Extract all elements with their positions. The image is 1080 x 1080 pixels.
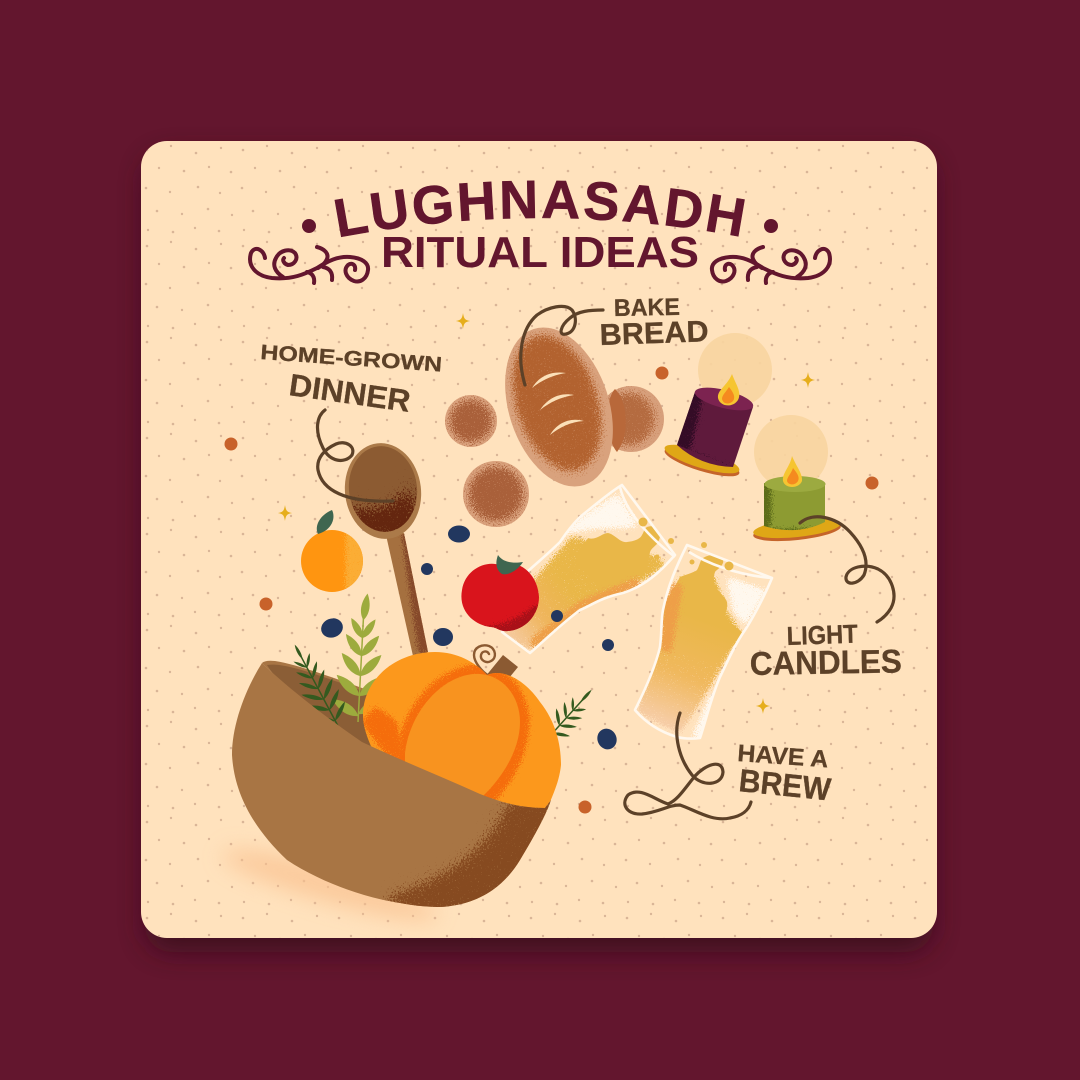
glass: right bbox=[635, 542, 772, 740]
bread: loaf bbox=[505, 328, 613, 486]
title dot left bbox=[302, 219, 316, 233]
candle: green bbox=[752, 415, 842, 545]
candle base bbox=[662, 442, 742, 482]
spoon handle bbox=[386, 533, 428, 656]
glass: left bbox=[498, 485, 675, 653]
fern: dark right bbox=[538, 679, 603, 747]
title bbox=[302, 180, 778, 277]
label: Have a brew: BREW bbox=[737, 762, 833, 808]
orange bbox=[301, 510, 363, 592]
title line: Ritual Ideas: RITUAL IDEAS bbox=[381, 228, 699, 277]
label: Light candles bbox=[749, 619, 902, 682]
candle halo bbox=[698, 333, 772, 407]
card shadow bbox=[145, 155, 933, 952]
label: Home-grown dinner: DINNER bbox=[287, 367, 413, 419]
bowl: inner shade bbox=[267, 665, 395, 765]
glass frost bbox=[558, 492, 642, 546]
label: Bake bread: BREAD bbox=[599, 315, 709, 352]
pumpkin stem bbox=[485, 655, 518, 683]
bread: roll right bbox=[608, 386, 664, 452]
label: Bake bread bbox=[599, 294, 709, 352]
flame bbox=[783, 456, 802, 487]
glass frost bbox=[725, 575, 768, 628]
ornament: left flourish bbox=[250, 247, 368, 283]
bubbles bbox=[638, 518, 674, 560]
pumpkin curl bbox=[474, 645, 495, 676]
apple bbox=[461, 555, 539, 632]
title line: Lughnasadh: LUGHNASADH bbox=[334, 180, 745, 238]
pumpkin centre lobe bbox=[405, 674, 520, 796]
label: Have a brew bbox=[737, 740, 833, 808]
squiggle: bake bread bbox=[521, 306, 603, 385]
pumpkin bbox=[360, 645, 561, 815]
label: Light candles: LIGHT bbox=[786, 619, 858, 651]
title dot right bbox=[764, 219, 778, 233]
label: Have a brew: HAVE A bbox=[737, 740, 829, 773]
label: Bake bread: BAKE bbox=[614, 294, 680, 322]
label: Home-grown dinner: HOME-GROWN bbox=[260, 341, 443, 377]
bread: roll left bbox=[445, 395, 497, 447]
label: Light candles: CANDLES bbox=[749, 642, 902, 682]
candle base bbox=[752, 517, 842, 545]
glass rim bbox=[620, 487, 675, 557]
bread: roll bottom bbox=[463, 461, 529, 527]
blueberries bbox=[318, 526, 620, 753]
panel: paper card bbox=[141, 141, 937, 938]
candle: purple bbox=[662, 333, 772, 482]
flame bbox=[718, 374, 739, 405]
squiggle: candles bbox=[800, 517, 894, 622]
bubbles bbox=[690, 542, 734, 570]
small orange dots bbox=[224, 366, 878, 814]
sparkles bbox=[278, 313, 815, 714]
ornament: right flourish bbox=[712, 247, 830, 283]
fern: light bbox=[329, 591, 392, 723]
squiggle: dinner bbox=[317, 410, 393, 501]
bowl: inner back bbox=[262, 661, 395, 760]
squiggle: brew bbox=[625, 713, 751, 819]
bowl bbox=[232, 663, 560, 915]
candle halo bbox=[754, 415, 828, 489]
glass rim bbox=[689, 552, 772, 578]
label: Home-grown dinner bbox=[260, 341, 443, 419]
bowl ground shadow bbox=[224, 844, 436, 926]
spoon bbox=[344, 443, 428, 655]
orange leaf bbox=[317, 510, 333, 534]
apple leaf bbox=[496, 555, 523, 574]
fern: dark left bbox=[278, 635, 355, 735]
loaf score marks bbox=[532, 373, 584, 435]
spoon bowl bbox=[339, 439, 427, 543]
